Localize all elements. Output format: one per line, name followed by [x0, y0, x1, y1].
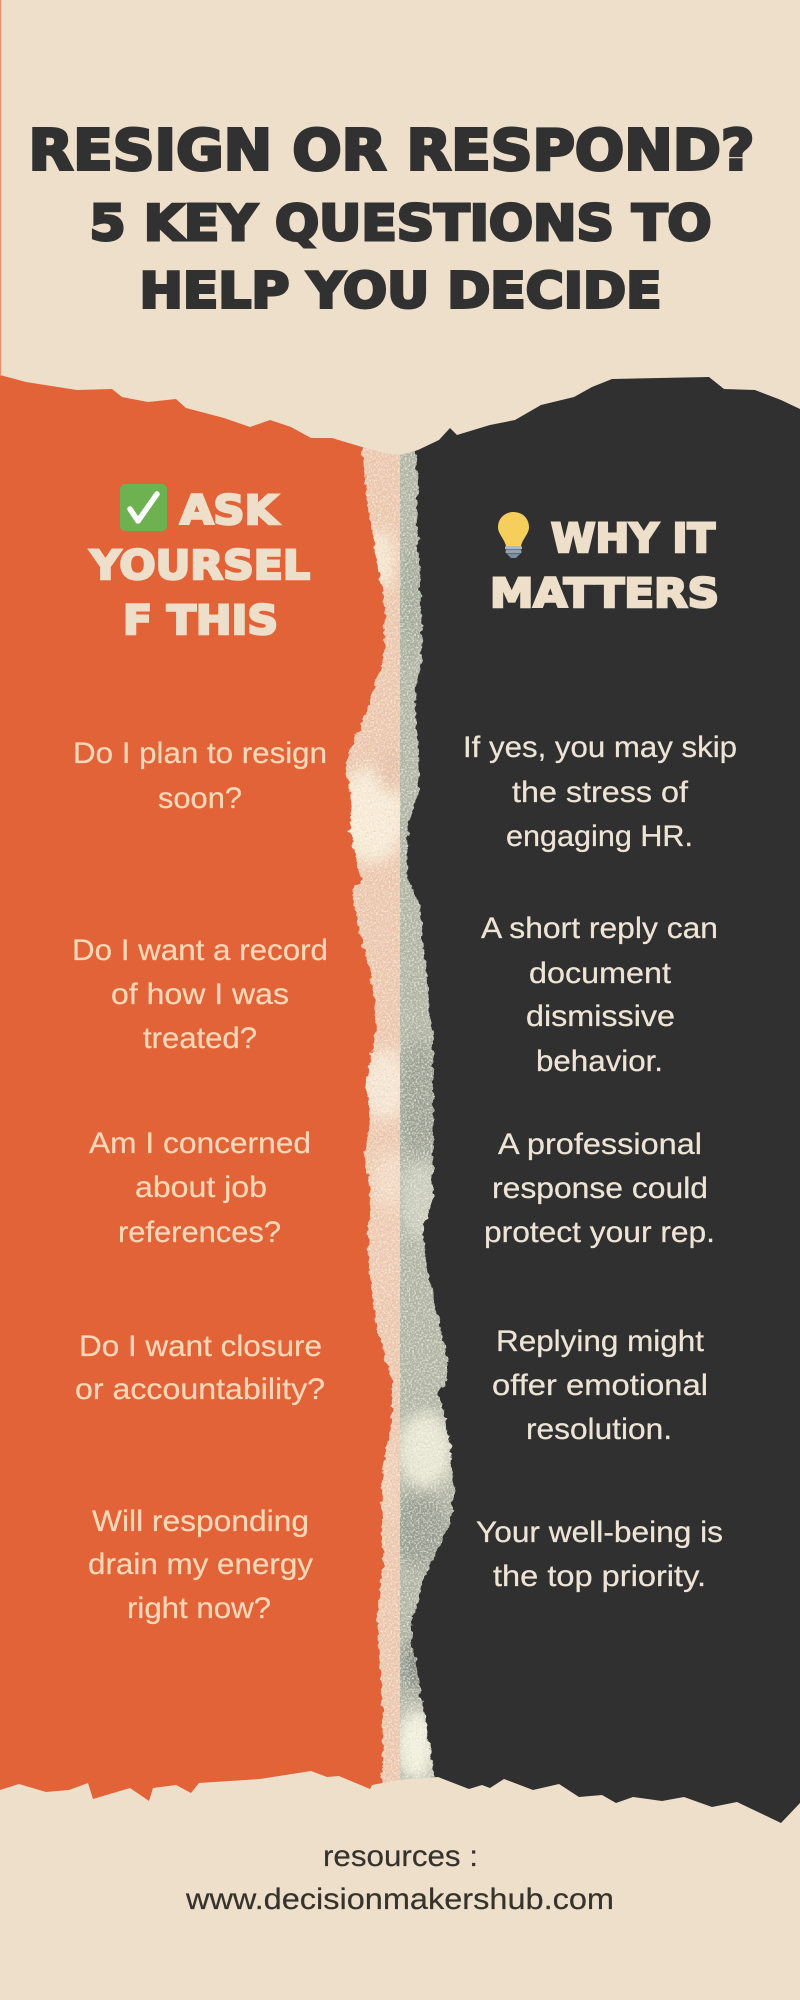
question 4: [75, 1330, 325, 1406]
question 3: Am I concerned: [89, 1127, 311, 1160]
heading: ask yourself this: ASK: [180, 488, 280, 534]
heading: ask yourself this: YOURSEL: [89, 543, 310, 589]
answer 4: resolution.: [526, 1413, 672, 1446]
answer 4: Replying might: [496, 1325, 705, 1358]
heading: why it matters: [490, 512, 719, 617]
footer: resources: www.decisionmakershub.com: [185, 1883, 614, 1916]
answer 3: A professional: [498, 1128, 702, 1161]
answer 4: offer emotional: [492, 1369, 708, 1402]
answer 1: If yes, you may skip: [463, 731, 737, 764]
answer 5: Your well-being is: [476, 1516, 723, 1549]
answer 3: [484, 1128, 715, 1249]
question 1: soon?: [158, 782, 242, 815]
question 1: [73, 737, 327, 815]
answer 2: dismissive: [526, 1000, 675, 1033]
question 5: right now?: [127, 1592, 271, 1625]
heading: why it matters: MATTERS: [490, 571, 719, 617]
panel: ask yourself (orange): [0, 360, 420, 1820]
icon: green check mark: [120, 484, 167, 531]
question 4: or accountability?: [75, 1373, 325, 1406]
answer 2: [481, 912, 718, 1078]
question 4: Do I want closure: [79, 1330, 322, 1363]
icon: light bulb: [498, 512, 529, 558]
answer 1: [463, 731, 737, 853]
title: [28, 118, 754, 320]
heading: ask yourself this: [89, 484, 310, 644]
torn edge: top beige sheet: [0, 0, 800, 455]
answer 1: the stress of: [512, 776, 689, 809]
question 3: about job: [135, 1171, 267, 1204]
answer 5: the top priority.: [493, 1560, 706, 1593]
heading: ask yourself this: F THIS: [123, 598, 278, 644]
torn paper divider: [346, 447, 456, 1783]
question 1: Do I plan to resign: [73, 737, 327, 770]
footer: resources: resources :: [323, 1840, 478, 1873]
footer: resources: [185, 1840, 614, 1916]
torn edge: bottom beige sheet: [0, 1771, 800, 2000]
answer 5: [476, 1516, 723, 1593]
question 3: [89, 1127, 311, 1249]
question 5: drain my energy: [88, 1548, 313, 1581]
title: HELP YOU DECIDE: [140, 262, 662, 320]
left edge orange hairline: [0, 0, 1, 376]
title: 5 KEY QUESTIONS TO: [90, 195, 712, 252]
question 3: references?: [118, 1216, 281, 1249]
question 2: [72, 934, 328, 1055]
answer 4: [492, 1325, 708, 1446]
paper: peach left half: [346, 447, 400, 1783]
answer 3: protect your rep.: [484, 1216, 715, 1249]
answer 2: document: [529, 957, 672, 990]
answer 3: response could: [492, 1172, 708, 1205]
answer 2: A short reply can: [481, 912, 718, 945]
title: RESIGN OR RESPOND?: [28, 118, 754, 184]
question 5: Will responding: [92, 1505, 309, 1538]
heading: why it matters: WHY IT: [551, 516, 716, 562]
panel: why it matters (dark): [400, 360, 800, 1840]
answer 1: engaging HR.: [506, 820, 693, 853]
question 2: treated?: [143, 1022, 257, 1055]
question 2: Do I want a record: [72, 934, 328, 967]
answer 2: behavior.: [536, 1045, 663, 1078]
paper: grey-green right half: [400, 450, 456, 1780]
question 2: of how I was: [111, 978, 289, 1011]
question 5: [88, 1505, 313, 1625]
